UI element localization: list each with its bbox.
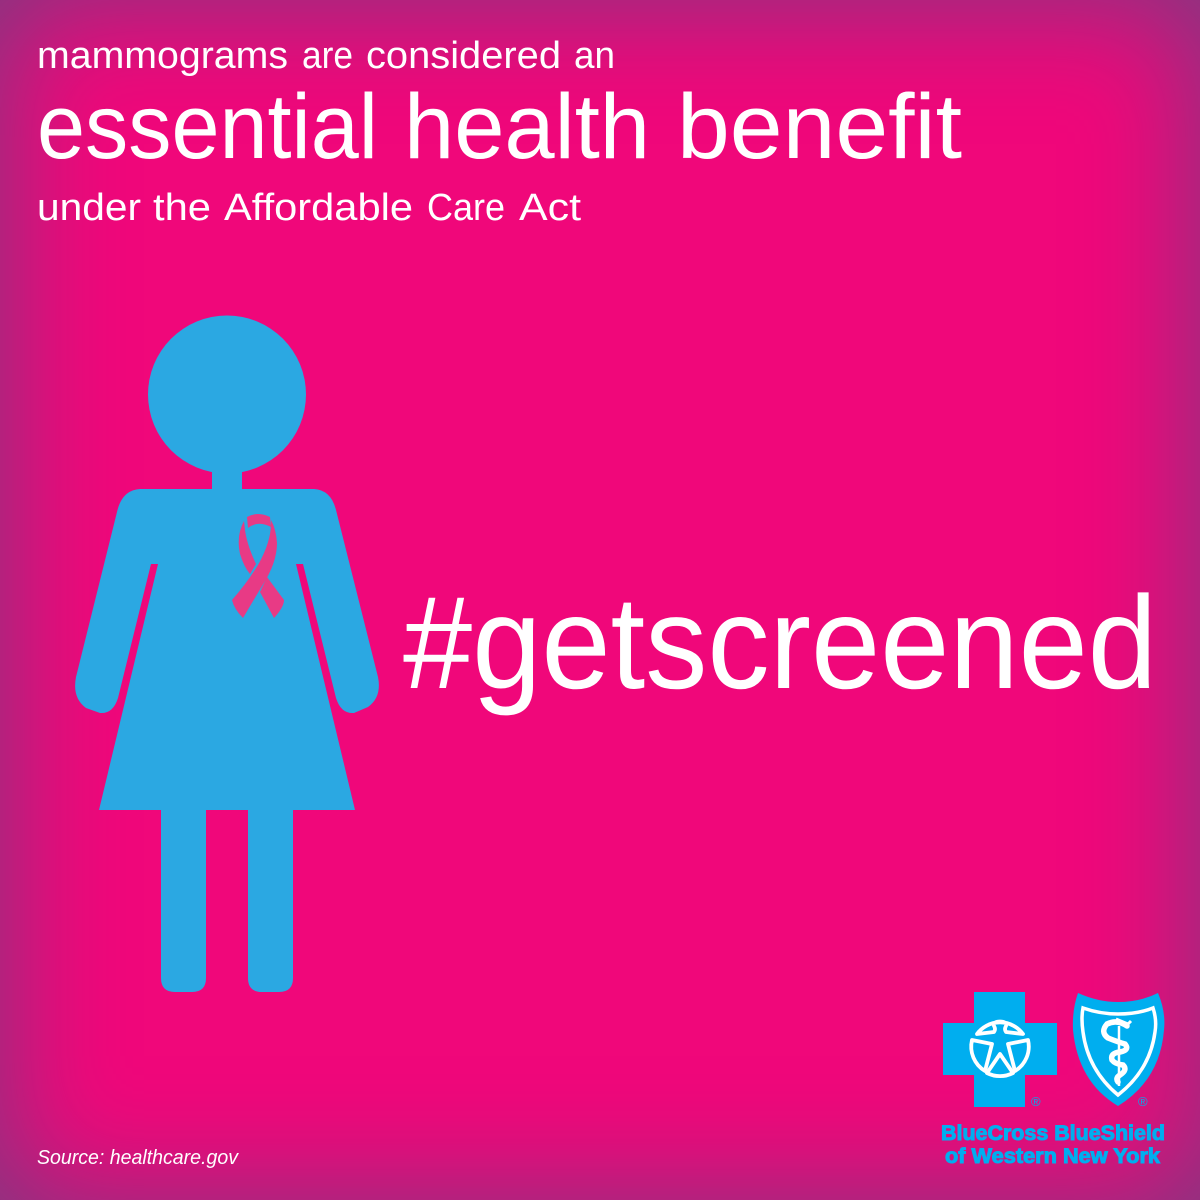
heading: intro line: an [574,35,615,77]
hashtag: #getscreened [403,569,1157,716]
registered mark: cross: ® [1031,1094,1041,1109]
heading: intro line: are [302,35,353,77]
heading: closing line [37,187,581,229]
icon: blue cross [943,992,1057,1107]
logo: BlueCross BlueShield [941,992,1165,1168]
logo text line one: BlueCross BlueShield [941,1122,1165,1145]
heading: intro line: mammograms [37,35,288,77]
figure left leg [161,808,206,992]
heading: closing line: Act [519,187,581,229]
heading: essential health benefit: health [404,76,650,178]
heading: closing line: the [153,187,211,229]
heading: closing line: Care [427,187,505,229]
figure body and arms [75,465,379,810]
figure right leg [248,808,293,992]
source note: Source: healthcare.gov [37,1147,239,1169]
icon: awareness ribbon [232,514,284,618]
heading: intro line: considered [366,35,561,77]
logo text line two: of Western New York [945,1145,1160,1168]
heading: essential health benefit [37,76,962,178]
heading: closing line: under [37,187,141,229]
icon: blue shield [1073,993,1164,1106]
icon: woman figure with ribbon [75,316,379,992]
heading: essential health benefit: essential [37,76,378,178]
heading: closing line: Affordable [224,187,413,229]
heading: intro line [37,35,615,77]
registered mark: shield: ® [1138,1094,1148,1109]
figure head [148,316,306,474]
heading: essential health benefit: benefit [677,76,962,178]
